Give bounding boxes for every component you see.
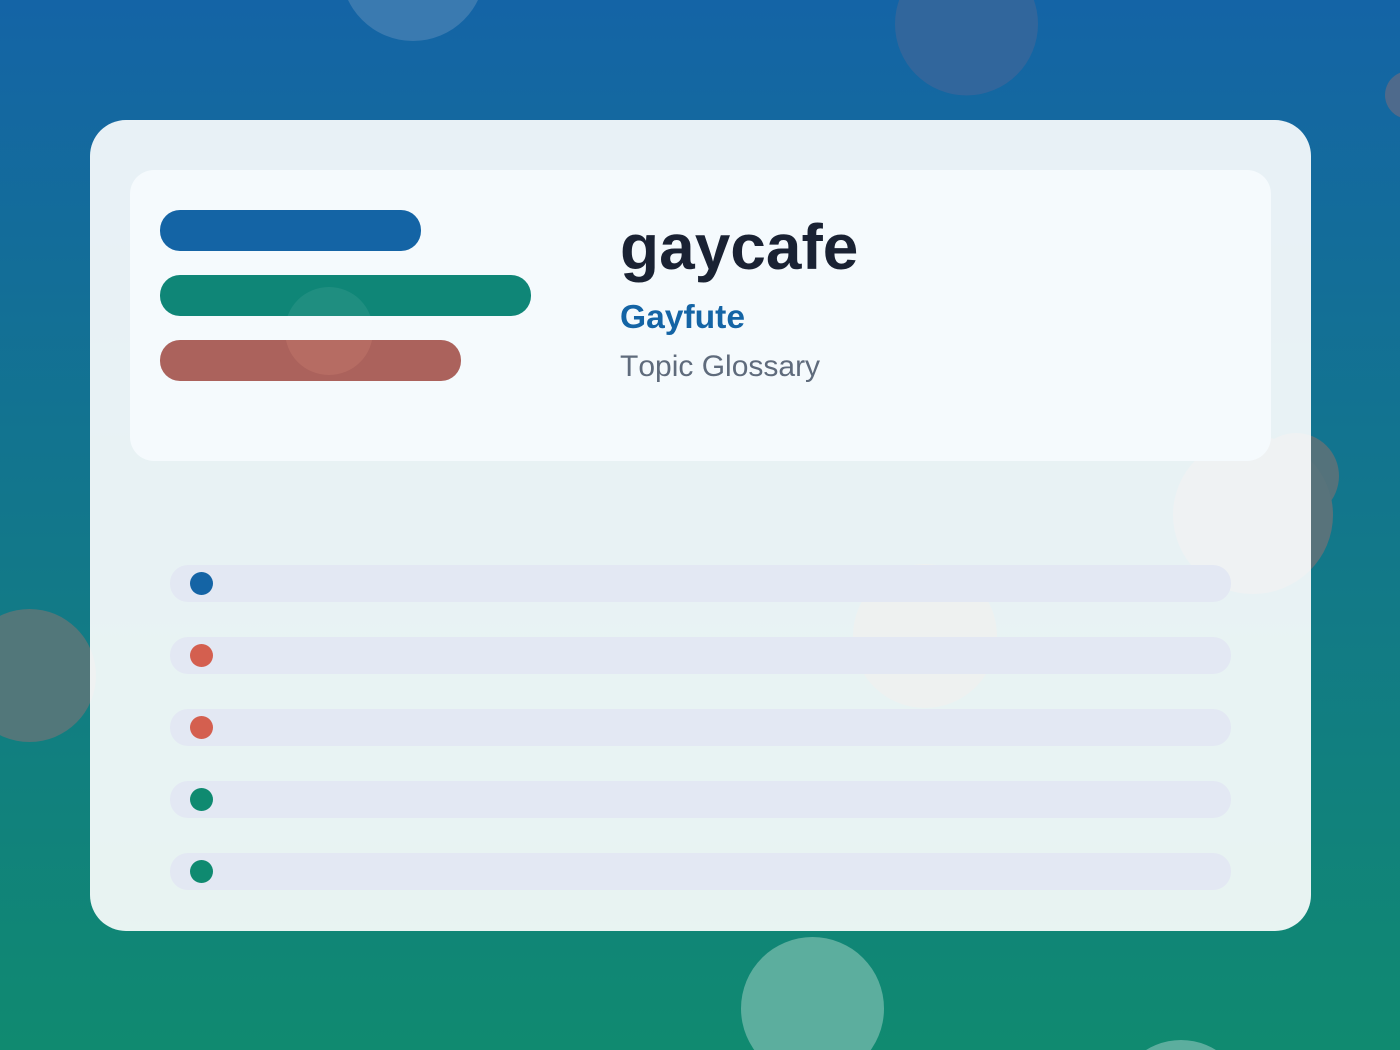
subtitle: Gayfute (620, 299, 745, 336)
dot: blue (190, 572, 213, 595)
background circle: far right edge (1385, 71, 1400, 119)
card (90, 120, 1311, 931)
caption: Topic Glossary (620, 350, 820, 383)
background circle: behind card centre (853, 564, 997, 708)
list row 5 (170, 853, 1231, 890)
list row 3 (170, 709, 1231, 746)
background circle: right upper (1253, 433, 1339, 519)
background circle: bottom centre (741, 937, 884, 1050)
overlay circle on bars (286, 287, 372, 375)
background circle: top right (895, 0, 1038, 96)
dot: green (190, 788, 213, 811)
background circle: right lower (1173, 436, 1333, 594)
background circle: left edge (0, 609, 96, 742)
list row 2 (170, 637, 1231, 674)
bar: red (160, 340, 461, 381)
title: gaycafe (620, 211, 858, 283)
bar: green (160, 275, 531, 316)
bar: blue (160, 210, 421, 251)
dot: green (190, 860, 213, 883)
background circle: bottom right (1146, 1040, 1216, 1050)
background circle: top left (341, 0, 485, 41)
dot: coral (190, 644, 213, 667)
panel: header (130, 170, 1271, 461)
dot: coral (190, 716, 213, 739)
list row 1 (170, 565, 1231, 602)
list row 4 (170, 781, 1231, 818)
